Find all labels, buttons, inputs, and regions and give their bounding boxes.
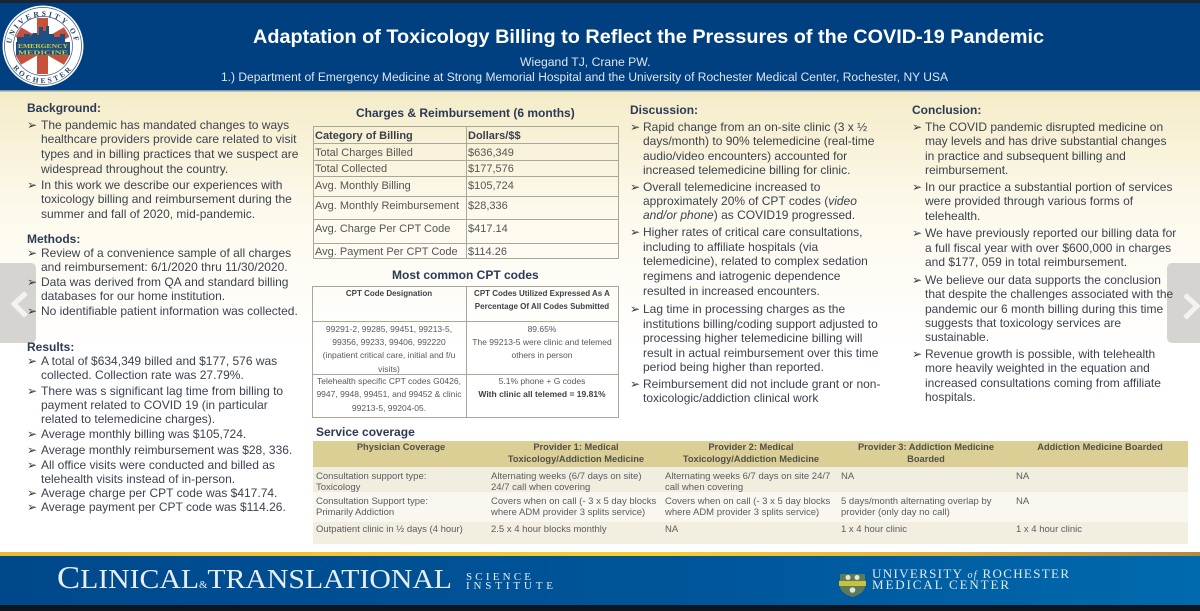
panel: methods: Review of a convenience sample of all charges: [41, 246, 291, 260]
table: cpt codes: [312, 286, 618, 418]
panel: conclusion: were provided through various forms of: [924, 194, 1134, 208]
table: charges and reimbursement: Category of Billing: [315, 130, 413, 142]
table: service coverage: where ADM provider 3 splits service): [664, 507, 819, 518]
table: service coverage: Consultation Support type:: [316, 496, 428, 507]
table: charges and reimbursement: Avg. Monthly Reimbursement: [315, 200, 459, 212]
logo text: clinical and translational science institute: SCIENCE: [466, 571, 531, 583]
table: service coverage: 1 x 4 hour clinic: [1016, 524, 1082, 535]
panel: results: ➢: [27, 384, 37, 398]
panel: discussion: ➢: [630, 180, 640, 194]
table: service coverage: Provider 2: Medical: [708, 442, 794, 452]
table: service coverage: Alternating weeks (6/7 days on site): [491, 471, 642, 482]
table: service coverage: NA: [1016, 471, 1030, 482]
panel: results: Results:: [27, 340, 74, 354]
panel: discussion: approximately 20% of CPT codes (video: [643, 194, 857, 208]
logo: emergency medicine seal: MEDICINE: [18, 50, 68, 56]
table: cpt codes: 99291-2, 99285, 99451, 99213-5,: [326, 324, 452, 334]
table: cpt codes: others in person: [512, 350, 573, 360]
table: charges and reimbursement: Total Collected: [315, 163, 387, 175]
table: service coverage: Alternating weeks 6/7 days on site 24/7: [665, 471, 830, 482]
table: charges and reimbursement: $417.14: [468, 223, 508, 235]
table: charges and reimbursement: Avg. Charge Per CPT Code: [315, 223, 450, 235]
table: service coverage: Addiction Medicine Boarded: [1037, 442, 1163, 452]
panel: methods: ➢: [27, 275, 37, 289]
panel: conclusion: ➢: [912, 347, 922, 361]
table: service coverage: NA: [665, 524, 679, 535]
panel: results: Average monthly reimbursement was $28, 336.: [41, 443, 292, 457]
panel: discussion: Overall telemedicine increased to: [643, 180, 821, 194]
icon: next arrow: [1167, 263, 1200, 343]
panel: methods: [27, 232, 298, 318]
table: service coverage: Primarily Addiction: [316, 507, 394, 518]
panel: conclusion: reimbursement.: [925, 163, 1008, 177]
panel: background: ➢: [27, 118, 37, 132]
panel: conclusion: hospitals.: [925, 390, 976, 404]
panel: discussion: and/or phone) as COVID19 progressed.: [643, 208, 855, 222]
panel: discussion: toxicologic/addiction clinical work: [643, 391, 819, 405]
panel: results: payment related to COVID 19 (in particular: [41, 398, 268, 412]
panel: conclusion: increased consultations coming from affiliate: [925, 376, 1161, 390]
table: cpt codes: CPT Code Designation: [346, 289, 432, 298]
panel: discussion: [630, 103, 880, 405]
panel: conclusion: and $177, 059 in total reimbursement.: [925, 255, 1127, 269]
logo: emergency medicine seal: [2, 6, 84, 86]
footer banner: [0, 552, 1200, 611]
logo text: university of rochester medical center: UNIVERSITY of ROCHESTER: [872, 566, 1069, 581]
table: cpt codes: 5.1% phone + G codes: [499, 376, 585, 386]
table: service coverage: 5 days/month alternating overlap by: [841, 496, 992, 507]
table: service coverage: NA: [1016, 496, 1030, 507]
panel: results: ➢: [27, 458, 37, 472]
panel: conclusion: Revenue growth is possible, with telehealth: [925, 347, 1155, 361]
authors: Wiegand TJ, Crane PW.: [520, 55, 651, 69]
logo: emergency medicine seal: UNIVERSITY OF: [6, 11, 79, 43]
panel: results: A total of $634,349 billed and $177, 576 was: [41, 354, 277, 368]
heading: most common cpt codes: Most common CPT codes: [392, 268, 539, 282]
icon: previous arrow: [0, 263, 36, 343]
panel: conclusion: [912, 103, 1176, 404]
panel: conclusion: a full fiscal year with over $600,000 in charges: [925, 241, 1171, 255]
panel: conclusion: ➢: [912, 120, 922, 134]
heading: charges and reimbursement: Charges & Reimbursement (6 months): [356, 106, 575, 120]
logo text: clinical and translational science institute: INSTITUTE: [466, 580, 553, 592]
table: cpt codes: 99356, 99233, 99406, 992220: [332, 337, 446, 347]
panel: background: toxicology billing and reimbursement during the: [41, 192, 292, 206]
table: charges and reimbursement: $28,336: [468, 200, 508, 212]
table: charges and reimbursement: $114.26: [468, 246, 507, 258]
panel: discussion: Higher rates of critical care consultations,: [643, 225, 862, 239]
panel: results: [27, 340, 292, 514]
panel: conclusion: Conclusion:: [912, 103, 981, 117]
panel: results: ➢: [27, 443, 37, 457]
panel: discussion: period being higher than reported.: [643, 360, 824, 374]
table: cpt codes: With clinic all telemed = 19.81%: [478, 389, 606, 399]
panel: discussion: Discussion:: [630, 103, 698, 117]
panel: conclusion: that despite the challenges associated with the: [925, 287, 1173, 301]
table: service coverage: 24/7 call when covering: [491, 482, 590, 493]
panel: discussion: institutions billing/coding support adjusted to: [643, 317, 878, 331]
table: charges and reimbursement: Dollars/$$: [468, 130, 521, 142]
panel: conclusion: telehealth.: [925, 209, 980, 223]
panel: discussion: resulted in increased encounters.: [643, 284, 820, 298]
panel: discussion: ➢: [630, 377, 640, 391]
panel: discussion: including to affiliate hospitals (via: [643, 240, 819, 254]
affiliation: 1.) Department of Emergency Medicine at Strong Memorial Hospital and the University of Rochester Medical Center, Rochester, NY USA: [221, 70, 949, 84]
panel: results: There was s significant lag time from billing to: [41, 384, 283, 398]
icon: university shield: [839, 574, 866, 597]
table: service coverage: NA: [841, 471, 855, 482]
table: service coverage: Outpatient clinic in ½ days (4 hour): [316, 524, 463, 535]
panel: conclusion: The COVID pandemic disrupted medicine on: [925, 120, 1163, 134]
panel: results: related to telemedicine charges).: [41, 412, 215, 426]
table: service coverage: Toxicology: [316, 482, 361, 493]
table: charges and reimbursement: $105,724: [468, 180, 514, 192]
title: Adaptation of Toxicology Billing to Reflect the Pressures of the COVID-19 Pandemic: [253, 26, 1044, 48]
panel: methods: ➢: [27, 246, 37, 260]
panel: discussion: regimens and iatrogenic dependence: [643, 269, 841, 283]
table: charges and reimbursement: $636,349: [468, 147, 514, 159]
table: cpt codes: visits): [378, 364, 400, 374]
table: service coverage: Provider 3: Addiction Medicine: [858, 442, 994, 452]
table: charges and reimbursement: Avg. Monthly Billing: [315, 180, 411, 192]
panel: results: telehealth visits instead of in-person.: [41, 472, 235, 486]
panel: conclusion: pandemic our 6 month billing during this time: [925, 302, 1163, 316]
panel: conclusion: more heavily weighted in the equation and: [925, 361, 1150, 375]
table: service coverage: where ADM provider 3 splits service): [490, 507, 645, 518]
panel: conclusion: suggests that toxicology services are: [925, 316, 1121, 330]
panel: methods: Data was derived from QA and standard billing: [41, 275, 288, 289]
panel: conclusion: In our practice a substantial portion of services: [925, 180, 1172, 194]
heading: service coverage: Service coverage: [316, 425, 415, 439]
panel: background: ➢: [27, 178, 37, 192]
table: charges and reimbursement: Total Charges Billed: [315, 147, 413, 159]
table: service coverage: call when covering: [665, 482, 743, 493]
panel: discussion: result in actual reimbursement over this time: [643, 346, 879, 360]
table: cpt codes: (inpatient critical care, initial and f/u: [323, 350, 456, 360]
table: cpt codes: The 99213-5 were clinic and telemed: [472, 337, 612, 347]
table: service coverage: 2.5 x 4 hour blocks monthly: [491, 524, 607, 535]
panel: results: ➢: [27, 486, 37, 500]
panel: discussion: ➢: [630, 120, 640, 134]
logo: emergency medicine seal: EMERGENCY: [18, 43, 69, 50]
panel: methods: databases for our home institution.: [41, 289, 225, 303]
panel: conclusion: ➢: [912, 226, 922, 240]
panel: conclusion: We believe our data supports the conclusion: [925, 273, 1161, 287]
panel: background: healthcare providers provide care related to visit: [41, 132, 297, 146]
panel: background: widespread throughout the country.: [40, 162, 228, 176]
panel: background: summer and fall of 2020, mid-pandemic.: [41, 207, 255, 221]
panel: results: Average monthly billing was $105,724.: [41, 427, 246, 441]
table: service coverage: Consultation support type:: [316, 471, 426, 482]
table: service coverage: Toxicology/Addiction Medicine: [508, 454, 644, 464]
panel: results: Average payment per CPT code was $114.26.: [41, 500, 286, 514]
panel: conclusion: in practice and subsequent billing and: [925, 149, 1126, 163]
panel: discussion: ➢: [630, 302, 640, 316]
panel: results: ➢: [27, 427, 37, 441]
panel: discussion: telemedicine), related to complex sedation: [643, 254, 868, 268]
panel: methods: No identifiable patient information was collected.: [41, 304, 298, 318]
table: service coverage: Covers when on call (- 3 x 5 day blocks: [491, 496, 657, 507]
logo: emergency medicine seal: ROCHESTER: [13, 64, 72, 84]
table: charges and reimbursement: [314, 126, 618, 258]
panel: discussion: audio/video encounters) accounted for: [643, 149, 847, 163]
table: service coverage: provider (only day no call): [841, 507, 950, 518]
panel: discussion: processing higher telemedicine billing will: [643, 331, 862, 345]
panel: methods: Methods:: [27, 232, 80, 246]
panel: conclusion: may levels and has drive substantial changes: [925, 134, 1166, 148]
panel: conclusion: ➢: [912, 273, 922, 287]
panel: results: Average charge per CPT code was $417.74.: [41, 486, 277, 500]
table: service coverage: [313, 441, 1188, 544]
table: service coverage: 1 x 4 hour clinic: [841, 524, 907, 535]
panel: methods: and reimbursement: 6/1/2020 thru 11/30/2020.: [41, 260, 288, 274]
panel: discussion: increased telemedicine billing for clinic.: [643, 163, 850, 177]
table: cpt codes: Telehealth specific CPT codes G0426,: [317, 376, 461, 386]
logo text: university of rochester medical center: MEDICAL CENTER: [872, 577, 1009, 592]
panel: background: The pandemic has mandated changes to ways: [41, 118, 289, 132]
panel: conclusion: We have previously reported our billing data for: [925, 226, 1176, 240]
table: service coverage: Boarded: [907, 454, 945, 464]
panel: discussion: Reimbursement did not include grant or non-: [643, 377, 880, 391]
table: cpt codes: 9947, 9948, 99451, and 99452 & clinic: [316, 389, 462, 399]
panel: background: Background:: [27, 101, 101, 115]
table: service coverage: Physician Coverage: [357, 442, 445, 452]
panel: discussion: days/month) to 90% telemedicine (real-time: [643, 134, 875, 148]
table: service coverage: Toxicology/Addiction Medicine: [683, 454, 819, 464]
logo text: clinical and translational science institute: CLINICAL &TRANSLATIONAL: [57, 559, 452, 595]
logo text: university of rochester medical center: [872, 566, 1069, 592]
panel: background: In this work we describe our experiences with: [41, 178, 282, 192]
panel: results: All office visits were conducted and billed as: [41, 458, 275, 472]
panel: results: ➢: [27, 500, 37, 514]
table: cpt codes: CPT Codes Utilized Expressed As A: [474, 289, 610, 298]
panel: discussion: Rapid change from an on-site clinic (3 x ½: [643, 120, 867, 134]
panel: conclusion: ➢: [912, 180, 922, 194]
panel: discussion: ➢: [630, 225, 640, 239]
table: cpt codes: Percentage Of All Codes Submitted: [475, 302, 609, 311]
table: service coverage: Covers when on call (- 3 x 5 day blocks: [665, 496, 831, 507]
panel: results: ➢: [27, 354, 37, 368]
table: cpt codes: 99213-5, 99204-05.: [352, 403, 426, 413]
table: charges and reimbursement: Avg. Payment Per CPT Code: [315, 246, 458, 258]
panel: background: [27, 101, 299, 221]
table: cpt codes: 89.65%: [528, 324, 557, 334]
header banner: [0, 0, 1200, 92]
panel: background: types and in billing practices that we suspect are: [41, 147, 299, 161]
table: service coverage: Provider 1: Medical: [533, 442, 619, 452]
table: charges and reimbursement: $177,576: [468, 163, 514, 175]
panel: methods: ➢: [27, 304, 37, 318]
panel: discussion: Lag time in processing charges as the: [643, 302, 845, 316]
panel: results: collected. Collection rate was 27.79%.: [41, 368, 244, 382]
panel: conclusion: sustainable.: [925, 330, 989, 344]
